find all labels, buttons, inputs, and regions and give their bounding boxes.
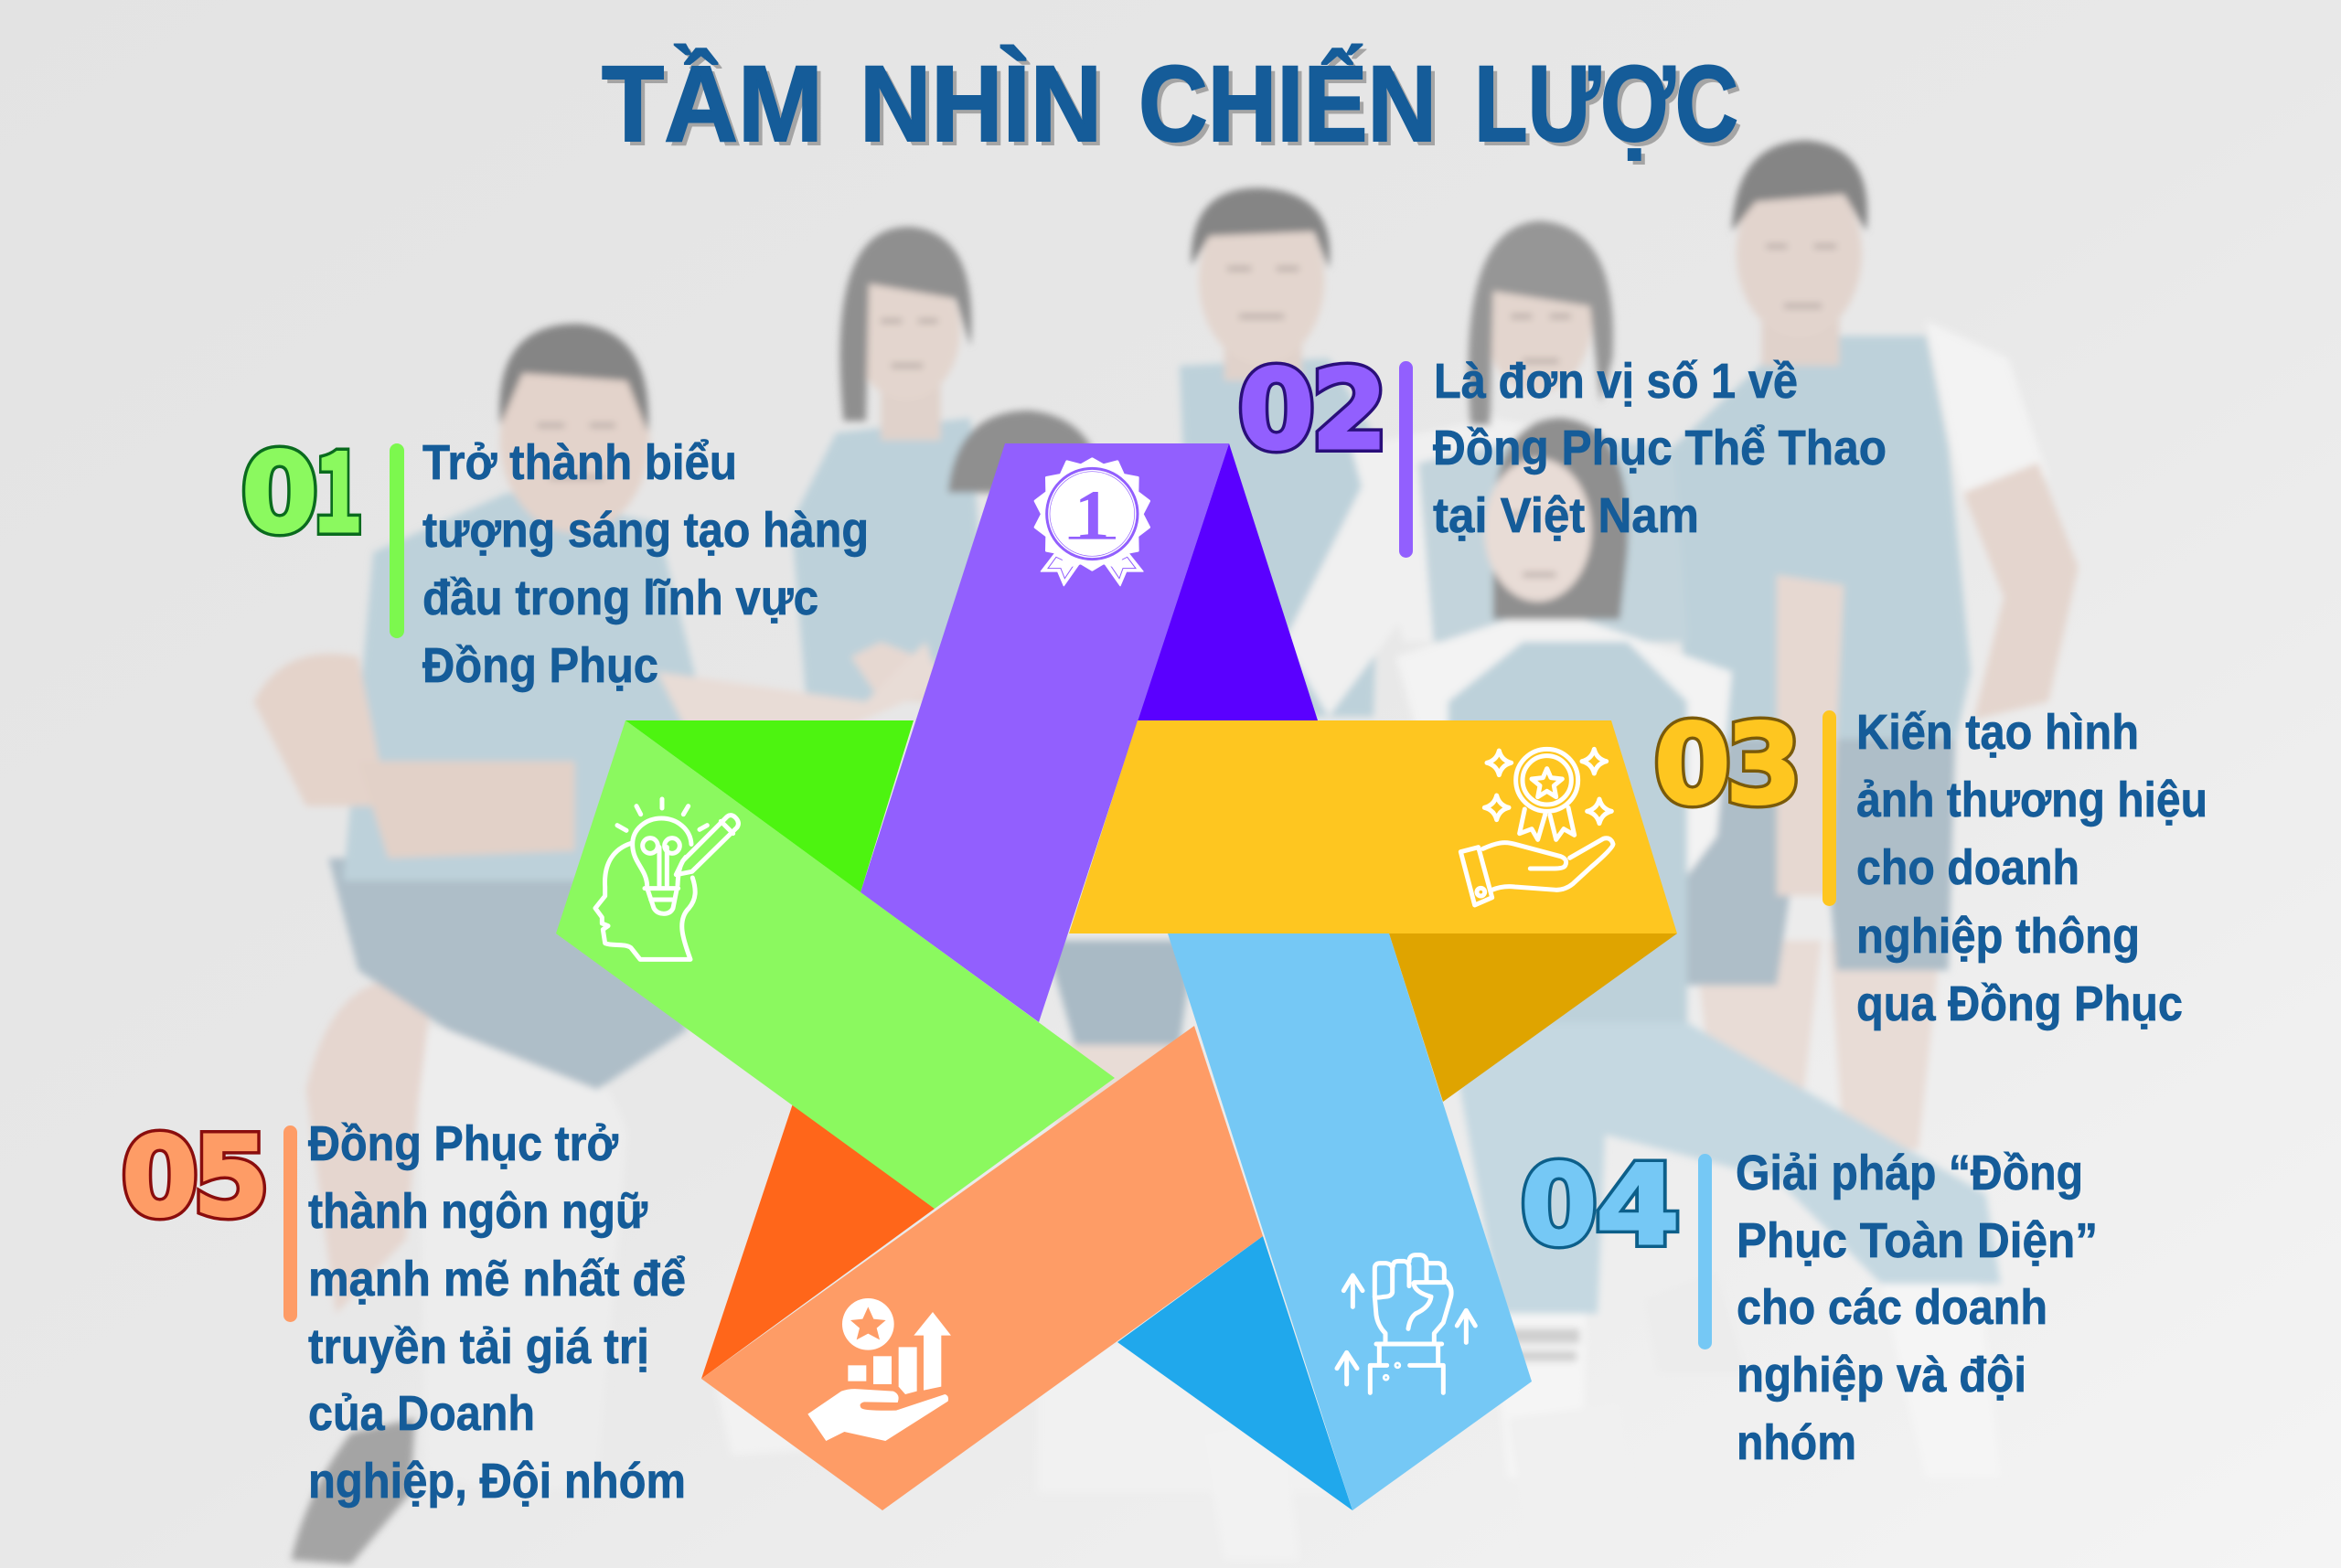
item 04 <box>1521 1143 2098 1470</box>
title: LƯỢC <box>1474 44 1738 165</box>
number 05 <box>122 1115 269 1242</box>
text 01: Đồng Phục <box>422 638 658 693</box>
number 01: 0 <box>241 431 318 558</box>
number 05: 0 <box>122 1115 198 1242</box>
rear left woman <box>791 227 986 701</box>
number 02 <box>1238 347 1388 475</box>
text 04: Giải pháp “Đồng <box>1736 1146 2083 1200</box>
icon: number one award badge <box>1035 459 1149 586</box>
text 02: tại Việt Nam <box>1433 488 1699 543</box>
number 02: 0 <box>1238 347 1315 475</box>
item 03 <box>1654 702 2207 1031</box>
number 01 <box>241 404 363 563</box>
front woman <box>1396 418 2001 1560</box>
text 03 <box>1856 705 2207 1031</box>
icon: hand holding medal <box>1460 749 1613 905</box>
text 05: nghiệp, Đội nhóm <box>308 1454 686 1509</box>
icon: hand with growth bars and star <box>807 1298 951 1441</box>
band: yellow fold <box>1389 933 1677 1102</box>
number 05: 5 <box>193 1115 269 1242</box>
accent bar 03 <box>1823 710 1836 906</box>
text 05: Đồng Phục trở <box>308 1116 619 1171</box>
item 01 <box>241 404 869 693</box>
number 03: 3 <box>1726 702 1801 829</box>
icon: head with light bulb and pencil <box>595 799 738 959</box>
number 05: 0 <box>122 1115 198 1242</box>
accent bar 02 <box>1399 361 1413 558</box>
band: light blue <box>1168 933 1532 1510</box>
number 03: 0 <box>1654 702 1730 829</box>
number 02: 2 <box>1311 347 1388 475</box>
text 01 <box>422 435 869 693</box>
number 01: 1 <box>314 404 363 563</box>
text 03: nghiệp thông <box>1856 909 2140 964</box>
band: green fold <box>625 720 914 892</box>
item 05 <box>122 1115 686 1509</box>
band: blue fold <box>1117 1236 1352 1510</box>
title <box>602 43 1743 169</box>
icon: number one award badge: 1 <box>1074 476 1109 554</box>
band: orange <box>701 1026 1263 1510</box>
accent bar 01 <box>390 443 404 638</box>
title: NHÌN <box>860 44 1102 165</box>
title: TẦM <box>606 48 828 169</box>
number 02: 0 <box>1238 347 1315 475</box>
rear right man <box>1673 140 2079 1149</box>
number 04: 0 <box>1521 1143 1597 1270</box>
text 03: cho doanh <box>1856 840 2079 895</box>
band: purple fold <box>1138 443 1318 720</box>
number 05: 5 <box>193 1115 269 1242</box>
number 03 <box>1654 702 1801 829</box>
number 04 <box>1521 1143 1680 1270</box>
band: yellow <box>1069 720 1677 933</box>
number 03: 0 <box>1654 702 1730 829</box>
title: TẦM <box>602 43 823 165</box>
accent bar 04 <box>1698 1154 1712 1349</box>
number 04: 4 <box>1596 1143 1680 1270</box>
text 01: Trở thành biểu <box>422 435 737 490</box>
text 04: nghiệp và đội <box>1737 1348 2026 1403</box>
center seated person <box>717 411 1299 1560</box>
text 02 <box>1433 354 1887 543</box>
title: LƯỢC <box>1479 48 1743 169</box>
text 04 <box>1736 1146 2098 1470</box>
text 05 <box>308 1116 686 1509</box>
text 04: nhóm <box>1737 1415 1856 1470</box>
text 04: Phục Toàn Diện” <box>1737 1213 2098 1268</box>
item 02 <box>1238 347 1887 558</box>
text 05: thành ngôn ngữ <box>308 1184 648 1239</box>
left seated man <box>254 324 941 1564</box>
title: CHIẾN <box>1143 48 1441 169</box>
band: orange fold <box>701 1104 935 1379</box>
band: light green <box>556 720 1115 1209</box>
text 05: truyền tải giá trị <box>308 1319 649 1374</box>
number 01: 1 <box>314 404 363 563</box>
number 04: 0 <box>1521 1143 1597 1270</box>
text 01: đầu trong lĩnh vực <box>422 571 818 625</box>
number 04: 4 <box>1596 1143 1680 1270</box>
five-pointed folded ribbon star <box>556 443 1677 1510</box>
title: NHÌN <box>864 48 1106 169</box>
number 01: 0 <box>241 431 318 558</box>
title: CHIẾN <box>1138 43 1437 165</box>
number 03: 3 <box>1726 702 1801 829</box>
icon: raised fist with arrows <box>1337 1255 1475 1392</box>
text 03: ảnh thương hiệu <box>1856 773 2207 827</box>
band: purple <box>861 443 1229 1022</box>
text 04: cho các doanh <box>1737 1280 2047 1335</box>
text 03: qua Đồng Phục <box>1856 976 2183 1031</box>
text 02: Đồng Phục Thể Thao <box>1433 421 1887 475</box>
accent bar 05 <box>283 1125 297 1322</box>
text 05: của Doanh <box>308 1386 535 1441</box>
text 03: Kiến tạo hình <box>1856 705 2139 760</box>
rear right woman <box>1352 221 1687 642</box>
white box pedestals <box>1038 1343 1343 1493</box>
number 02: 2 <box>1311 347 1388 475</box>
text 05: mạnh mẽ nhất để <box>308 1252 686 1307</box>
rear center man <box>1180 188 1418 717</box>
text 02: Là đơn vị số 1 về <box>1434 354 1798 409</box>
text 01: tượng sáng tạo hàng <box>422 503 869 558</box>
